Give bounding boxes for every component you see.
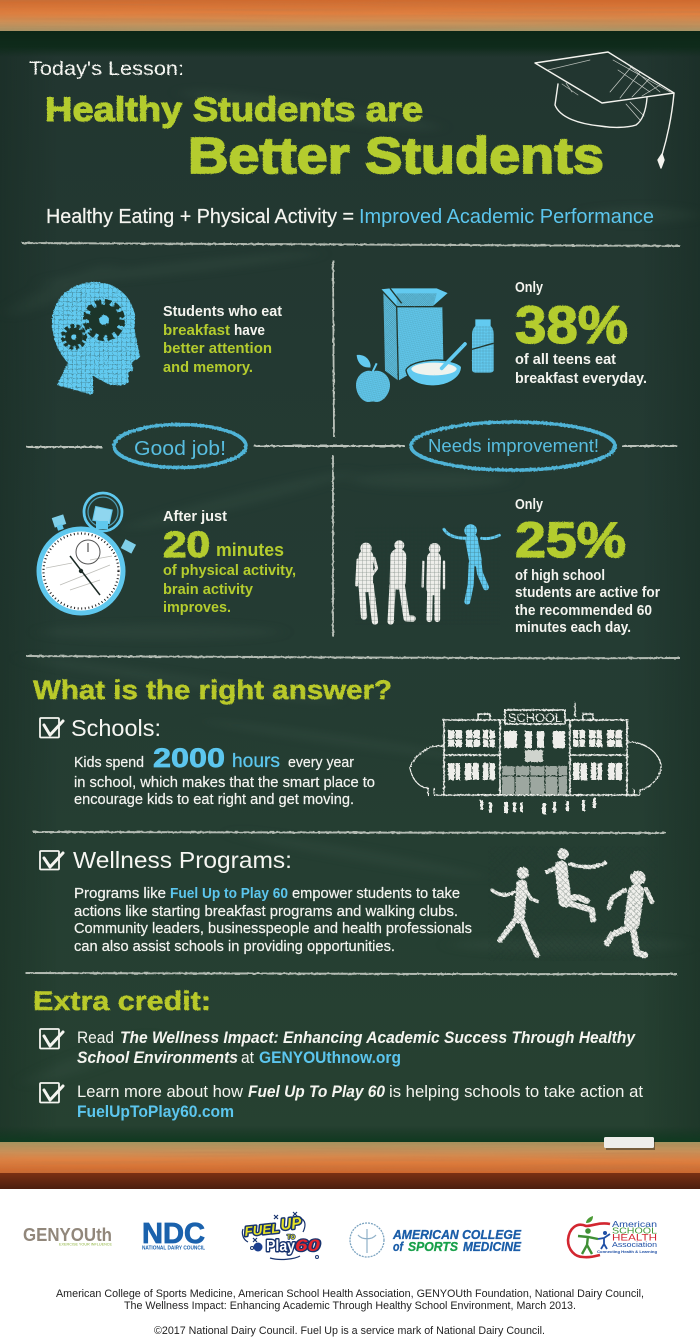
icon: checkbox <box>40 851 63 870</box>
bottle <box>472 319 494 373</box>
body text: can also assist schools in providing opportunities. <box>74 939 395 955</box>
text: GENYOUthnow.org <box>259 1048 401 1067</box>
text: 20 minutes: After just <box>163 509 227 525</box>
logo: American School Health Association: American <box>612 1219 657 1229</box>
heading: extra credit: Extra credit: <box>33 986 211 1016</box>
list item: read the wellness impact <box>40 1028 636 1067</box>
text: is helping schools to take action at <box>389 1082 643 1101</box>
text: breakfast attention: better attention <box>163 341 272 357</box>
text: 20 minutes: 20 <box>163 524 210 565</box>
icon: stopwatch <box>39 493 136 613</box>
text: Fuel Up To Play 60 <box>248 1082 385 1101</box>
stat: 38% of teens: Only <box>515 280 543 296</box>
logo: Fuel Up to Play 60: Play <box>266 1238 295 1255</box>
apple <box>356 355 390 402</box>
body text: hours <box>232 751 280 772</box>
logo: American College of Sports Medicine: SPORTS <box>408 1240 459 1254</box>
stat: 38% of teens: of all teens eat <box>515 352 616 368</box>
wood frame: top <box>0 0 700 31</box>
subtitle equation: Healthy Eating + Physical Activity = <box>46 206 354 228</box>
subheading: Wellness Programs: <box>73 847 292 873</box>
logo: American School Health Association: Connecting Health & Learning <box>597 1250 657 1254</box>
stat: 25% of high school students: the recommended 60 <box>515 603 652 619</box>
logo: Fuel Up to Play 60: FUEL <box>244 1220 280 1239</box>
icon: head with gears <box>52 282 140 395</box>
student 3 <box>423 543 444 619</box>
small dial <box>76 540 100 564</box>
logo: American School Health Association <box>568 1216 657 1257</box>
logo: American College of Sports Medicine: of <box>393 1240 405 1254</box>
logo: American School Health Association: Association <box>612 1240 657 1249</box>
crown ring <box>84 493 122 531</box>
logo: Fuel Up to Play 60 <box>242 1212 321 1259</box>
wood frame: bottom <box>0 1142 700 1189</box>
body text: encourage kids to eat right and get moving. <box>74 792 354 808</box>
subtitle equation <box>46 206 654 228</box>
body text <box>74 743 375 808</box>
body text: empower students to take <box>292 886 460 902</box>
body text: every year <box>288 755 354 771</box>
logo: American School Health Association: HEALTH <box>612 1232 657 1242</box>
subheading: Schools: <box>71 715 161 741</box>
text: at <box>241 1048 254 1067</box>
footer sources <box>56 1288 644 1337</box>
body text: 2000 <box>153 743 225 773</box>
text: breakfast attention: have <box>234 323 265 339</box>
logo: Fuel Up to Play 60: TO <box>287 1235 296 1241</box>
text: FuelUpToPlay60.com <box>77 1102 234 1121</box>
stat: 25% of high school students: 25% <box>515 512 626 568</box>
text <box>77 1028 636 1067</box>
logo: American College of Sports Medicine: AMERICAN COLLEGE <box>392 1228 522 1242</box>
text: breakfast attention <box>163 304 282 376</box>
callout: good job <box>114 424 246 468</box>
text: Read <box>77 1028 114 1047</box>
callout: good job: Good job! <box>134 438 226 460</box>
text: 20 minutes: of physical activity, <box>163 563 296 579</box>
student 2 <box>391 540 413 622</box>
icon: checkbox <box>40 718 63 738</box>
list item: learn more <box>40 1082 643 1121</box>
stat: 38% of teens: breakfast everyday. <box>515 371 647 387</box>
text: Learn more about how <box>77 1082 244 1101</box>
logo: National Dairy Council: NATIONAL DAIRY COUNCIL <box>142 1246 205 1252</box>
logo: GENYOUth: EXERCISE YOUR INFLUENCE <box>59 1242 112 1246</box>
text: The Wellness Impact: Enhancing Academic Success Through Healthy <box>120 1028 636 1047</box>
windows lower <box>448 763 460 780</box>
runner 2 <box>547 848 605 920</box>
text <box>77 1082 643 1121</box>
body text: in school, which makes that the smart place to <box>74 775 375 791</box>
icon: checkbox <box>40 1029 63 1048</box>
text: breakfast attention: and memory. <box>163 360 253 376</box>
runner 3 <box>607 870 652 955</box>
logo: National Dairy Council: NDC <box>142 1218 205 1250</box>
logo: American College of Sports Medicine: MEDICINE <box>463 1240 522 1254</box>
footer sources: The Wellness Impact: Enhancing Academic Through Healthy School Environment, March 2013. <box>124 1300 576 1312</box>
kicker: Today's Lesson: Today's Lesson: <box>29 59 184 80</box>
stat: 25% of high school students: students are active for <box>515 585 660 601</box>
section: schools <box>40 715 375 808</box>
runner 1 <box>492 867 537 955</box>
body text <box>74 886 472 955</box>
section: wellness programs <box>40 847 472 955</box>
title line 1: Healthy Students are <box>45 91 423 129</box>
text: breakfast attention: Students who eat <box>163 304 282 320</box>
callout: needs improvement: Needs improvement! <box>428 436 599 456</box>
logo: Fuel Up to Play 60: UP <box>280 1215 303 1234</box>
footer sources: American College of Sports Medicine, American School Health Association, GENYOUth Foundation, National Dairy Council, <box>56 1288 644 1300</box>
illustration: running students <box>488 846 658 961</box>
logo: GENYOUth: GENYOUth <box>23 1225 112 1245</box>
icon: graduation cap <box>535 52 674 168</box>
text: 20 minutes: brain activity <box>163 582 253 598</box>
logo: American School Health Association: SCHOOL <box>612 1226 657 1236</box>
trees <box>410 742 661 795</box>
windows upper <box>448 730 622 814</box>
subtitle equation: Improved Academic Performance <box>359 206 654 228</box>
jumping student <box>444 524 499 602</box>
stat: 38% of teens <box>515 280 647 387</box>
title block <box>29 59 604 184</box>
logo: American College of Sports Medicine <box>350 1223 522 1257</box>
cereal box <box>381 288 448 381</box>
footer sources: ©2017 National Dairy Council. Fuel Up is a service mark of National Dairy Council. <box>154 1325 545 1337</box>
text: breakfast attention: breakfast <box>163 323 230 339</box>
text: School Environments <box>77 1048 238 1067</box>
chalk piece <box>604 1137 655 1150</box>
stat: 25% of high school students: of high school <box>515 568 605 584</box>
icon: breakfast foods <box>356 288 494 402</box>
case <box>39 529 123 613</box>
stat: 25% of high school students <box>515 497 660 636</box>
logo: Fuel Up to Play 60: 60 <box>295 1236 321 1255</box>
bowl <box>406 344 465 386</box>
small gear <box>63 326 85 348</box>
illustration: school building <box>410 703 661 814</box>
side buttons <box>52 514 66 528</box>
hands <box>70 556 100 595</box>
students in front <box>480 800 483 810</box>
body text: Kids spend <box>74 755 144 771</box>
callout: needs improvement <box>411 422 615 470</box>
body text: Programs like <box>74 886 166 902</box>
body text: Community leaders, businesspeople and health professionals <box>74 921 472 937</box>
body text: actions like starting breakfast programs and walking clubs. <box>74 904 458 920</box>
student 1 <box>357 543 377 622</box>
icon: checkbox <box>40 1083 63 1102</box>
illustration: school building: SCHOOL <box>508 713 563 725</box>
stat: 38% of teens: 38% <box>515 296 628 355</box>
text: 20 minutes: minutes <box>216 540 284 560</box>
title line 2: Better Students <box>188 127 604 184</box>
stat: 25% of high school students: minutes each day. <box>515 620 631 636</box>
stat: 25% of high school students: Only <box>515 497 543 513</box>
text: 20 minutes <box>163 509 296 616</box>
body text: Fuel Up to Play 60 <box>170 886 288 902</box>
icon: students silhouettes <box>355 524 500 625</box>
heading: what is the right answer: What is the right answer? <box>33 675 392 705</box>
text: 20 minutes: improves. <box>163 600 231 616</box>
large gear <box>86 302 122 338</box>
